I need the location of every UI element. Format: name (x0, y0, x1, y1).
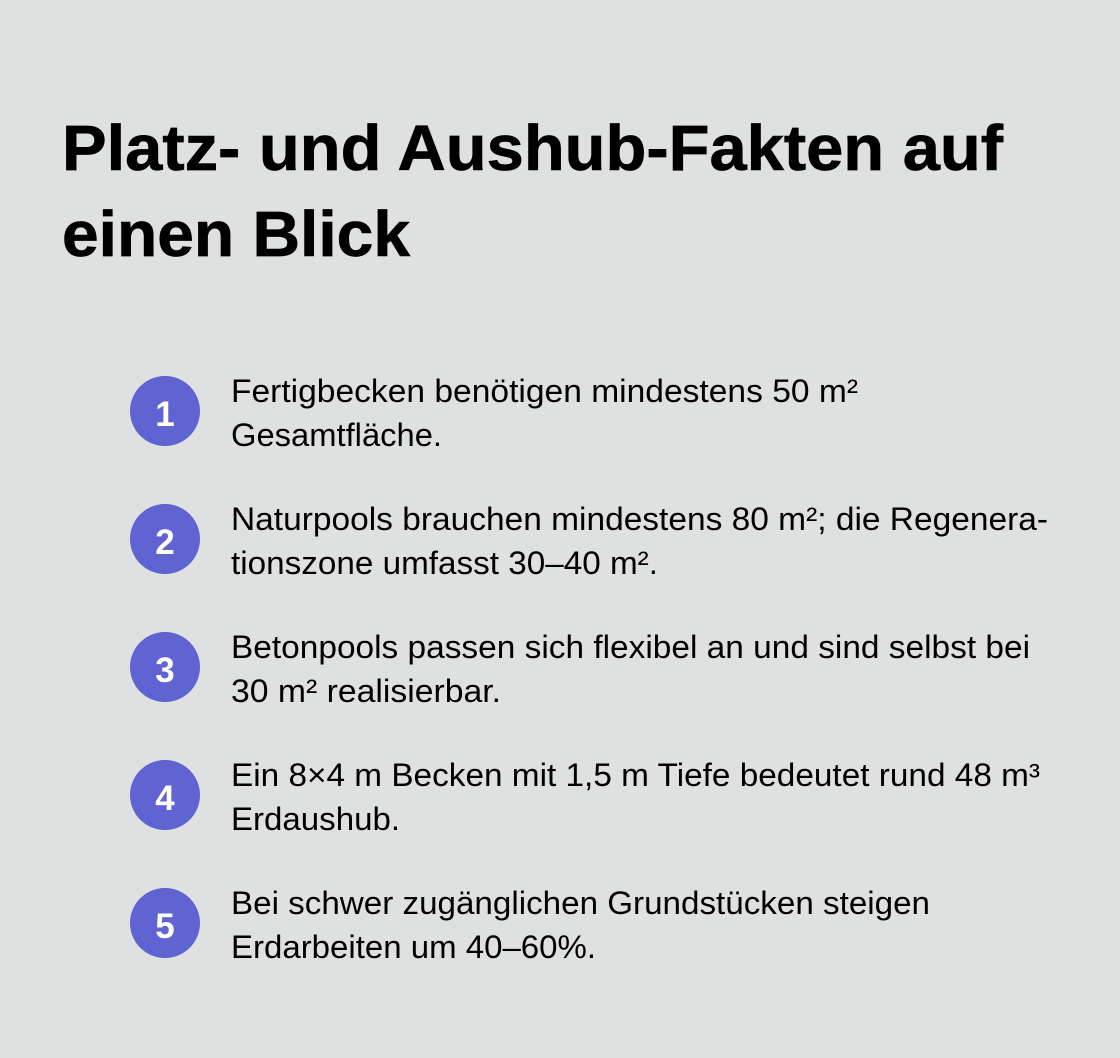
text: fact 1: Fertigbecken benötigen mindestens 50 m² (231, 373, 858, 409)
number badge 4: 4 (155, 779, 175, 818)
text: fact 5 (231, 885, 930, 965)
title: einen Blick (62, 198, 410, 270)
number badge 4 (130, 760, 200, 830)
list: facts (130, 373, 1048, 965)
text: fact 5: Bei schwer zugänglichen Grundstücken steigen (231, 885, 930, 921)
title: Platz- und Aushub-Fakten auf (62, 112, 1004, 184)
text: fact 1: Gesamtfläche. (231, 417, 442, 453)
title (62, 112, 1004, 270)
number badge 3: 3 (155, 651, 175, 690)
list item 4 (130, 757, 1040, 837)
text: fact 2: tionszone umfasst 30–40 m². (231, 545, 658, 581)
text: fact 1 (231, 373, 858, 453)
number badge 3 (130, 632, 200, 702)
text: fact 4: Ein 8×4 m Becken mit 1,5 m Tiefe bedeutet rund 48 m³ (231, 757, 1040, 793)
list item 2 (130, 501, 1048, 581)
list item 1 (130, 373, 858, 453)
text: fact 3 (231, 629, 1030, 709)
text: fact 3: 30 m² realisierbar. (231, 673, 501, 709)
text: fact 4 (231, 757, 1040, 837)
text: fact 2: Naturpools brauchen mindestens 80 m²; die Regenera- (231, 501, 1048, 537)
text: fact 2 (231, 501, 1048, 581)
text: fact 4: Erdaushub. (231, 801, 400, 837)
number badge 5: 5 (155, 907, 175, 946)
list item 5 (130, 885, 930, 965)
number badge 5 (130, 888, 200, 958)
number badge 1 (130, 376, 200, 446)
number badge 1: 1 (155, 395, 175, 434)
text: fact 3: Betonpools passen sich flexibel an und sind selbst bei (231, 629, 1030, 665)
number badge 2 (130, 504, 200, 574)
number badge 2: 2 (155, 523, 175, 562)
text: fact 5: Erdarbeiten um 40–60%. (231, 929, 596, 965)
list item 3 (130, 629, 1030, 709)
